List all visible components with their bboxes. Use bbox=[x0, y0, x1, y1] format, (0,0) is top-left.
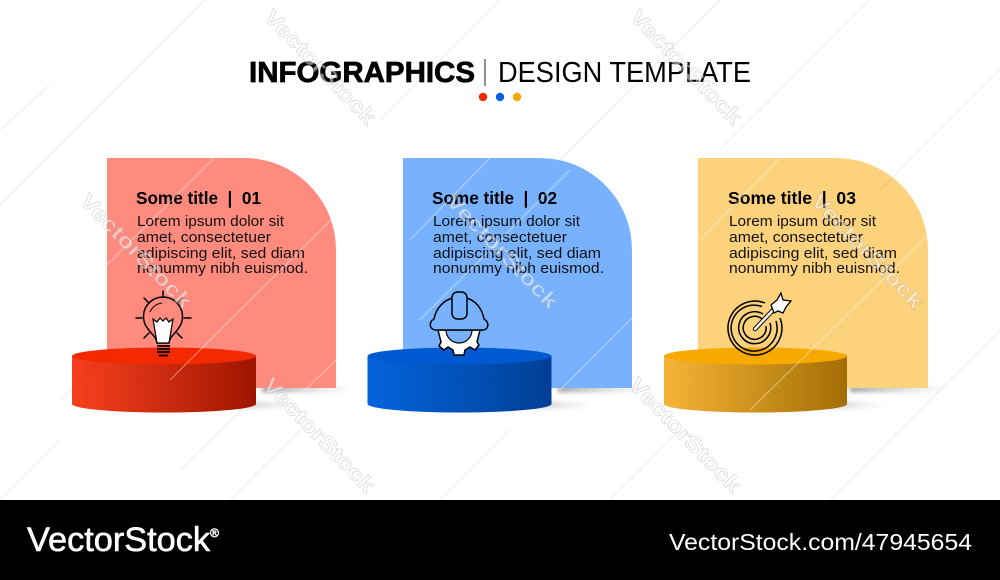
icon: target with arrow bbox=[728, 293, 791, 355]
watermark: diagonal lines and logos: VectorStock bbox=[441, 190, 562, 314]
card 03 body: adipiscing elit, sed diam bbox=[729, 245, 897, 262]
card 01 body: adipiscing elit, sed diam bbox=[137, 245, 305, 262]
card 02 body: amet, consectetuer bbox=[433, 229, 567, 246]
footer logo text: ® bbox=[210, 526, 219, 540]
watermark: diagonal lines and logos: VectorStock bbox=[259, 6, 380, 130]
title: INFOGRAPHICS bbox=[249, 57, 475, 89]
footer bar bbox=[0, 500, 1000, 580]
cylinder: yellow bbox=[664, 348, 885, 412]
watermark: diagonal lines and logos: VectorStock bbox=[258, 374, 379, 498]
card 01 body bbox=[137, 213, 308, 277]
footer logo text: VectorStock bbox=[27, 521, 208, 559]
card 02 heading: Some title | 02 bbox=[432, 188, 557, 208]
card 02 body: nonummy nibh euismod. bbox=[433, 260, 604, 277]
panel: card 03 bbox=[698, 158, 950, 392]
card 01 body: amet, consectetuer bbox=[137, 229, 271, 246]
cylinder: red bbox=[72, 348, 300, 412]
watermark: diagonal lines and logos: VectorStock bbox=[75, 190, 196, 314]
footer url text: VectorStock.com/47945654 bbox=[669, 529, 972, 555]
card 03 body bbox=[729, 213, 900, 277]
card 02 body: Lorem ipsum dolor sit bbox=[433, 213, 581, 230]
card 03 body: amet, consectetuer bbox=[729, 229, 863, 246]
panel: card 01 bbox=[107, 158, 354, 392]
card 03 heading: Some title | 03 bbox=[728, 188, 856, 208]
card 02 body bbox=[433, 213, 604, 277]
cylinder: blue bbox=[368, 348, 595, 412]
icon: light bulb bbox=[136, 291, 191, 356]
card 01 body: Lorem ipsum dolor sit bbox=[137, 213, 285, 230]
icon: helmet with gear bbox=[430, 292, 488, 355]
card 01 heading: Some title | 01 bbox=[136, 188, 261, 208]
panel: card 02 bbox=[403, 158, 650, 392]
card 02 body: adipiscing elit, sed diam bbox=[433, 245, 601, 262]
card 03 body: nonummy nibh euismod. bbox=[729, 260, 900, 277]
watermark: diagonal lines and logos: VectorStock bbox=[624, 374, 745, 498]
title dots bbox=[479, 93, 521, 101]
title bbox=[249, 57, 751, 89]
watermark: diagonal lines and logos: VectorStock bbox=[806, 190, 927, 314]
watermark: diagonal lines and logos: VectorStock bbox=[625, 6, 746, 130]
card 03 body: Lorem ipsum dolor sit bbox=[729, 213, 877, 230]
card 01 body: nonummy nibh euismod. bbox=[137, 260, 308, 277]
title: DESIGN TEMPLATE bbox=[498, 57, 751, 89]
